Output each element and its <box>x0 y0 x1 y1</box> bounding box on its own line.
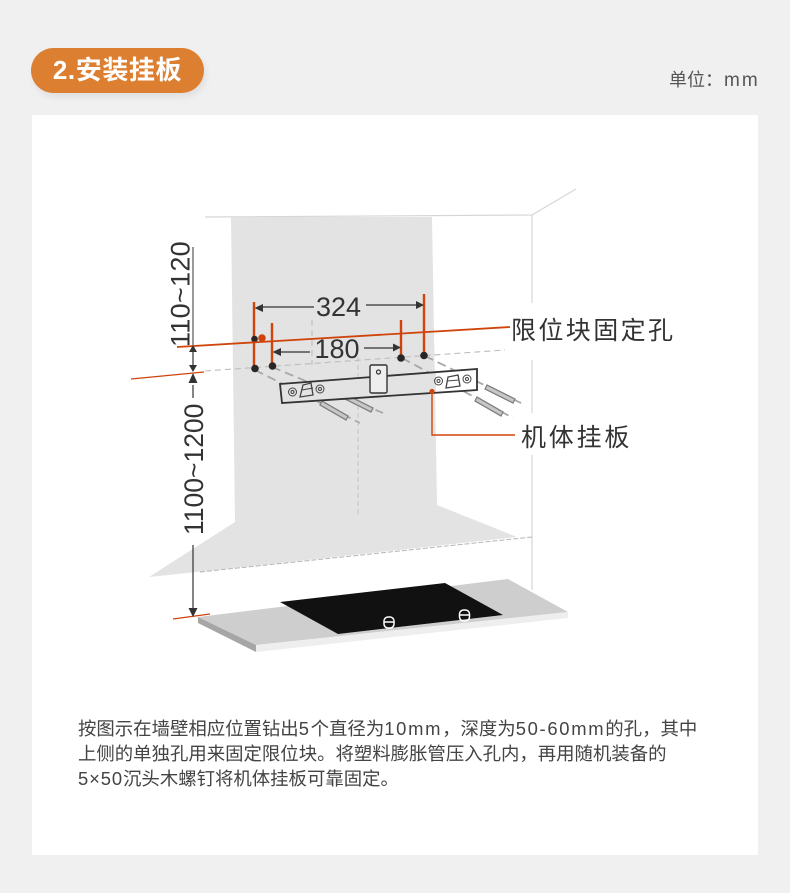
hob <box>280 583 503 634</box>
left plate bracket <box>288 383 324 397</box>
range hood silhouette <box>149 217 517 577</box>
leader: mounting plate: 机体挂板 <box>521 424 632 452</box>
heading badge: 2. install mounting plate: 2.安装挂板 <box>53 55 182 85</box>
hob knobs <box>384 610 470 628</box>
leader: limit block fixing hole: 限位块固定孔 <box>511 317 675 345</box>
height reference line <box>131 372 204 379</box>
dimension 1100~1200 <box>179 373 209 617</box>
dimension 1100~1200: 1100~1200 <box>179 404 209 535</box>
orange drill guides <box>254 294 424 368</box>
wall outline <box>205 189 576 590</box>
guide dashed lines <box>255 356 525 423</box>
drill holes <box>251 336 428 372</box>
worktop reference line <box>173 614 210 619</box>
dimension 324 <box>254 292 424 322</box>
description text: 5×50沉头木螺钉将机体挂板可靠固定。 <box>78 768 399 789</box>
hood centre dashed line <box>357 357 359 516</box>
description text: 按图示在墙壁相应位置钻出5个直径为10mm，深度为50-60mm的孔，其中 <box>78 718 697 739</box>
unit label: 单位：mm <box>669 70 760 91</box>
description text: 上侧的单独孔用来固定限位块。将塑料膨胀管压入孔内，再用随机装备的 <box>78 743 667 764</box>
horizontal and vertical thin guide lines <box>205 320 505 371</box>
dimension 110~120: 110~120 <box>166 241 196 347</box>
leader: mounting plate <box>429 389 632 452</box>
description text <box>78 718 697 789</box>
dimension 180: 180 <box>314 334 360 364</box>
dimension 324: 324 <box>316 292 361 322</box>
leader: limit block fixing hole <box>177 317 675 347</box>
hood bottom dashed edge <box>200 537 532 572</box>
dimension 180 <box>272 334 401 364</box>
expansion tubes <box>320 385 515 420</box>
right plate bracket <box>434 375 471 388</box>
panel: white content background <box>32 115 758 855</box>
heading badge: 2. install mounting plate <box>31 48 204 93</box>
plate tab <box>370 365 387 393</box>
mounting plate <box>280 365 477 403</box>
worktop with hob <box>198 579 568 652</box>
